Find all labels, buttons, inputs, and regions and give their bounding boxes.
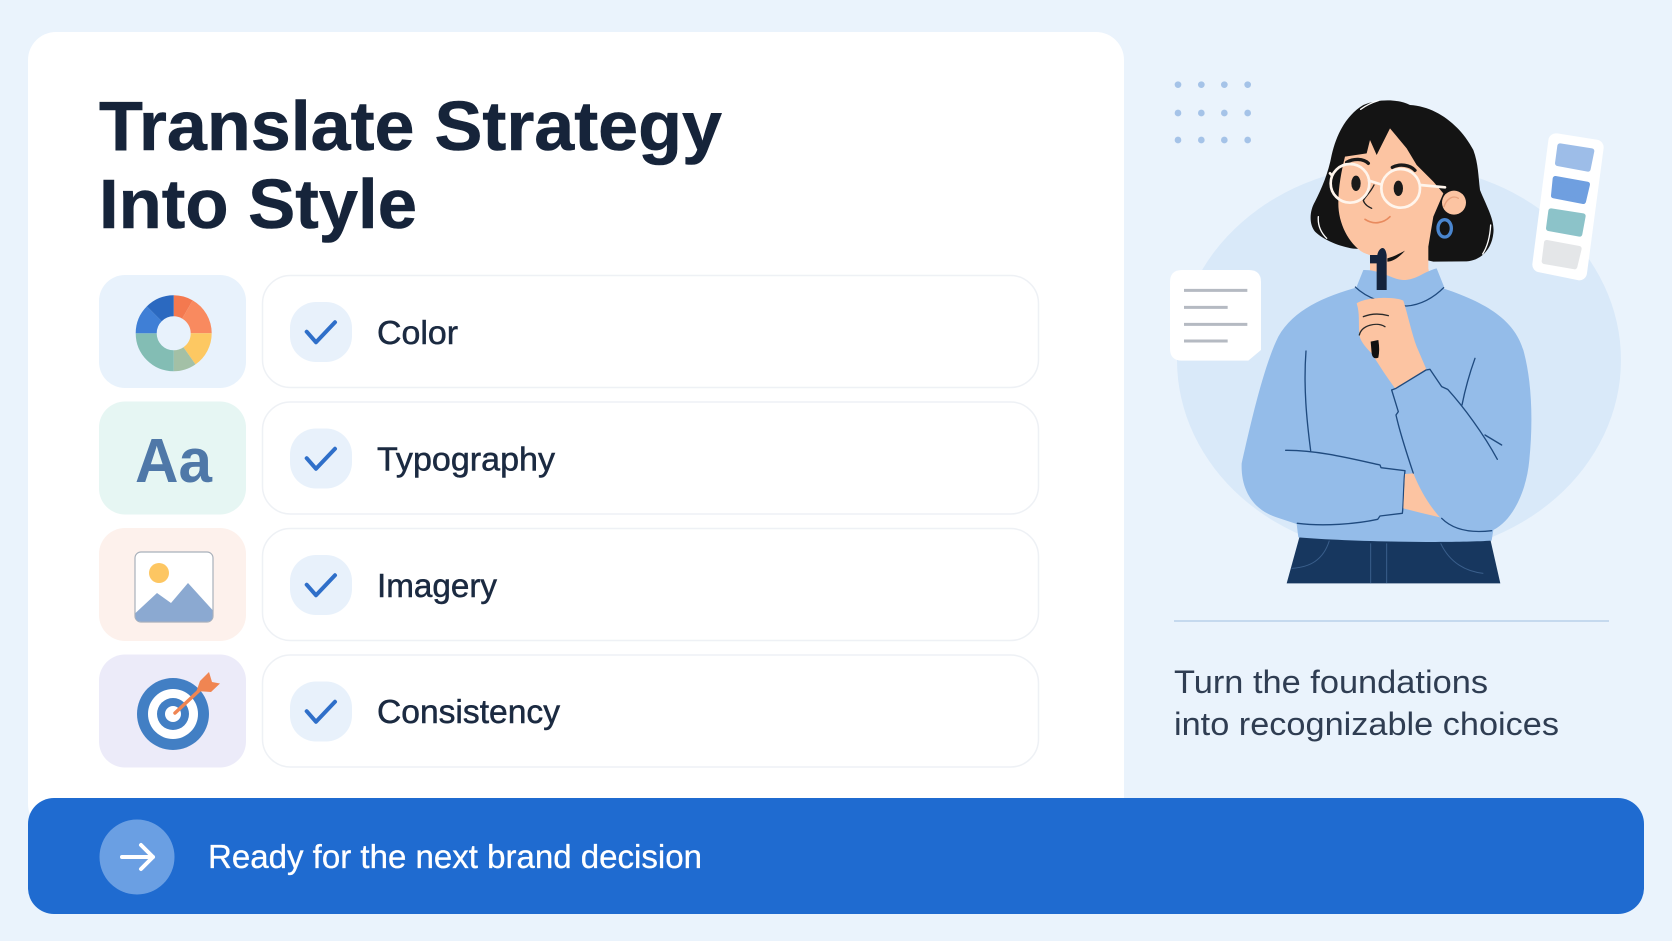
hand [1357, 298, 1427, 388]
row: Color [262, 276, 1038, 388]
row: Consistency [262, 655, 1038, 767]
row: Typography: Typography [377, 441, 556, 478]
pen [1370, 248, 1405, 358]
backdrop circle [1177, 165, 1621, 555]
sweater fold lines [1286, 351, 1502, 532]
hair back [1311, 100, 1494, 262]
icon tile: imagery picture [99, 528, 246, 641]
face [1338, 128, 1443, 257]
icon: arrow in circle [100, 820, 174, 894]
row: Typography [262, 402, 1038, 514]
title [99, 87, 722, 243]
panel: main white card [28, 32, 1124, 832]
banner text: Ready for the next brand decision [208, 838, 702, 875]
caption text: Turn the foundations [1174, 664, 1488, 700]
glasses [1330, 164, 1445, 208]
collar [1355, 268, 1444, 306]
illustration: thinking woman with palette and note [1170, 81, 1621, 583]
title: Into Style [99, 165, 417, 243]
palette swatch card [1540, 141, 1596, 273]
icon tile: color wheel [99, 275, 246, 388]
row: Color: Color [377, 314, 458, 351]
icon tile: typography Aa: Aa [135, 427, 212, 496]
hair strand highlights [1318, 101, 1491, 254]
row: Imagery: Imagery [377, 567, 497, 604]
icon tile: typography Aa [99, 402, 246, 514]
ear [1442, 191, 1466, 215]
other wrist [1403, 473, 1440, 517]
jeans [1287, 535, 1500, 583]
sweater body [1242, 287, 1531, 542]
decorative dot grid [1175, 81, 1251, 143]
divider [1174, 620, 1609, 622]
banner: ready for next decision [28, 798, 1644, 914]
note card [1170, 270, 1261, 361]
row: Imagery [262, 528, 1038, 640]
facial features [1347, 159, 1458, 223]
row: Consistency: Consistency [377, 693, 561, 730]
caption text: into recognizable choices [1174, 706, 1559, 742]
icon tile: consistency target [99, 654, 246, 768]
caption text [1174, 664, 1559, 742]
neck [1370, 247, 1430, 281]
earring [1438, 220, 1451, 237]
title: Translate Strategy [99, 87, 722, 165]
